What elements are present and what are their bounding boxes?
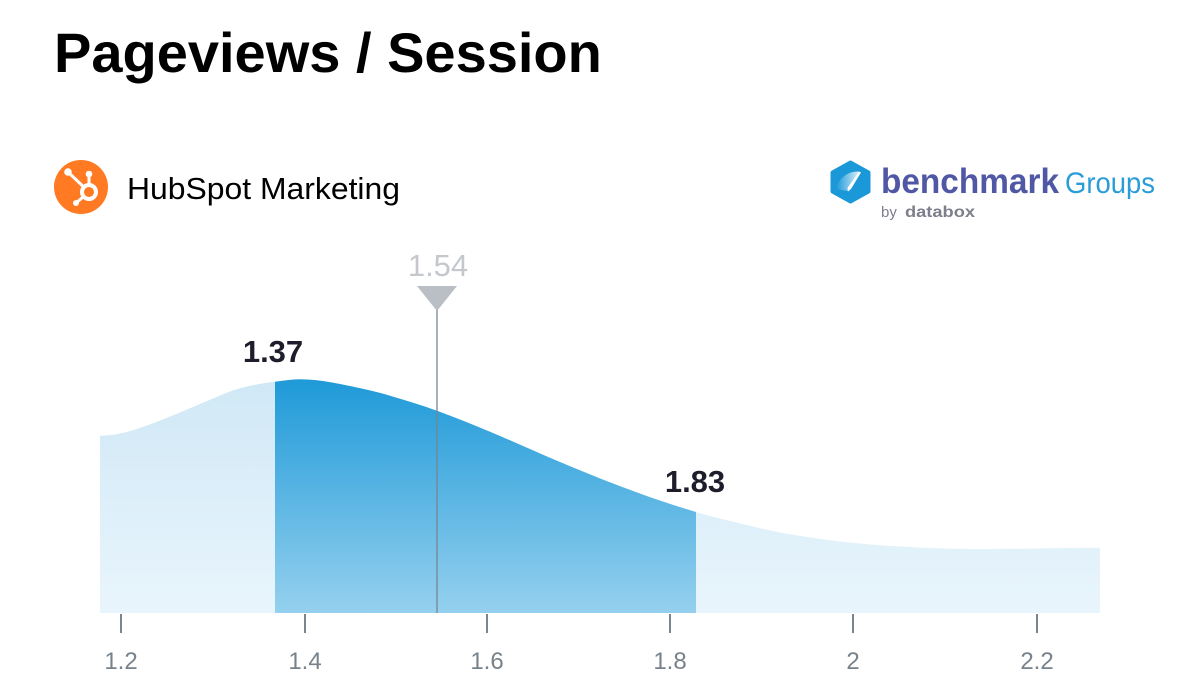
- x axis: 2: [846, 648, 860, 675]
- left light area: [100, 382, 275, 613]
- icon: HubSpot logo: [54, 160, 108, 214]
- title: Pageviews / Session: [54, 21, 602, 84]
- lower value label: 1.37: [243, 334, 303, 369]
- median line: [436, 306, 438, 613]
- logo wordmark: benchmark: [881, 162, 1060, 201]
- benchmark groups logo: [832, 162, 1155, 221]
- x axis: 2.2: [1020, 648, 1054, 675]
- x axis: 1.2: [104, 648, 138, 675]
- x axis: 1.4: [288, 648, 322, 675]
- x axis: 1.8: [653, 648, 687, 675]
- median value: 1.54: [408, 248, 468, 283]
- x axis: [104, 614, 1054, 675]
- logo byline: databox: databox: [905, 204, 975, 221]
- upper value label: 1.83: [665, 464, 725, 499]
- right light area: [696, 512, 1100, 613]
- distribution chart: [100, 248, 1100, 613]
- x axis: 1.6: [470, 648, 504, 675]
- logo byline: by: [881, 204, 897, 221]
- median marker: [417, 286, 457, 311]
- highlighted range area: [275, 379, 696, 613]
- logo wordmark: Groups: Groups: [1065, 167, 1155, 200]
- icon: hexagon gauge: [832, 162, 868, 202]
- source label: HubSpot Marketing: [127, 171, 400, 206]
